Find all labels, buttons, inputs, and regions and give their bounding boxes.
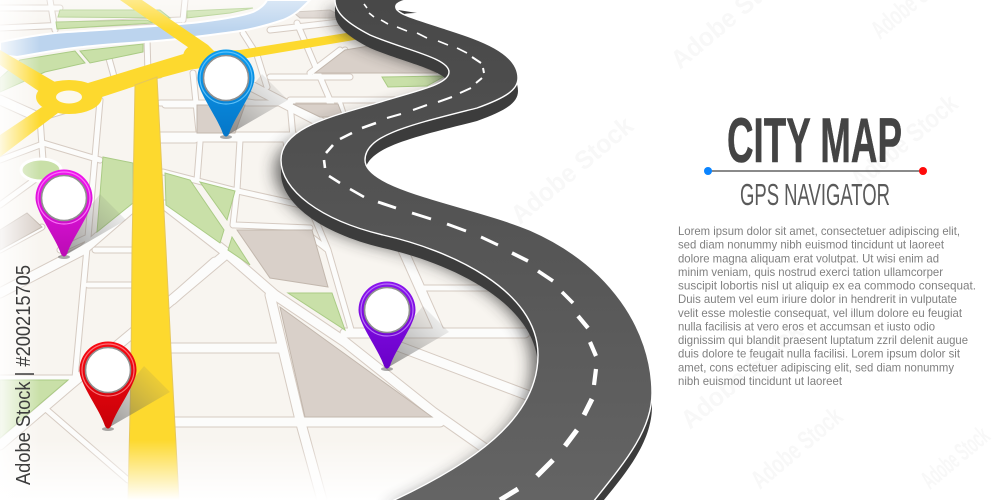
body text: Duis autem vel eum iriure dolor in hendrerit in vulputate	[678, 293, 957, 306]
body text: suscipit lobortis nisl ut aliquip ex ea commodo consequat.	[678, 280, 976, 292]
watermark pattern: Adobe Stock	[505, 110, 639, 230]
watermark pattern	[505, 0, 995, 495]
body text: velit esse molestie consequat, vel illum dolore eu feugiat	[678, 307, 963, 320]
body text	[678, 225, 976, 388]
body text: nibh euismod tincidunt ut laoreet	[678, 375, 843, 388]
body text: Lorem ipsum dolor sit amet, consectetuer adipiscing elit,	[678, 225, 960, 238]
road centre dashes	[324, 4, 596, 500]
watermark pattern: Adobe Stock	[845, 88, 964, 195]
map: paved lots	[0, 10, 437, 417]
pin: blue	[198, 50, 288, 139]
road surface	[281, 0, 652, 500]
body text: nulla facilisis at vero eros et accumsan et iusto odio	[678, 320, 935, 334]
watermark pattern: Adobe Stock	[745, 401, 848, 495]
body text: sed diam nonummy nibh euismod tincidunt ut laoreet	[678, 239, 945, 252]
winding road	[281, 0, 652, 500]
pin: magenta	[36, 170, 126, 259]
stock credit, vertical: Adobe Stock | #200215705	[13, 265, 35, 485]
map: river	[0, 0, 310, 57]
body text: dignissim qui blandit praesent luptatum zzril delenit augue	[678, 334, 968, 347]
body text: amet, cons ectetuer adipiscing elit, sed diam nonummy	[678, 361, 954, 374]
watermark pattern: Adobe Stock	[675, 315, 809, 435]
body text: dolore magna aliquam erat volutpat. Ut wisi enim ad	[678, 252, 939, 265]
map: parks	[0, 8, 445, 438]
road shadow on map	[263, 0, 538, 500]
divider with endpoint dots	[704, 167, 927, 175]
map: yellow roads	[0, 0, 366, 500]
pin: purple	[358, 282, 449, 371]
map: street network	[0, 0, 527, 500]
body text: minim veniam, quis nostrud exerci tation ullamcorper	[678, 266, 943, 279]
pin: red	[80, 342, 170, 431]
city map	[0, 0, 538, 500]
road side extrusion	[281, 0, 652, 500]
body text: duis dolore te feugait nulla facilisi. Lorem ipsum dolor sit	[678, 348, 961, 361]
subtitle: GPS NAVIGATOR: GPS NAVIGATOR	[740, 177, 890, 212]
map: fades	[0, 0, 432, 500]
